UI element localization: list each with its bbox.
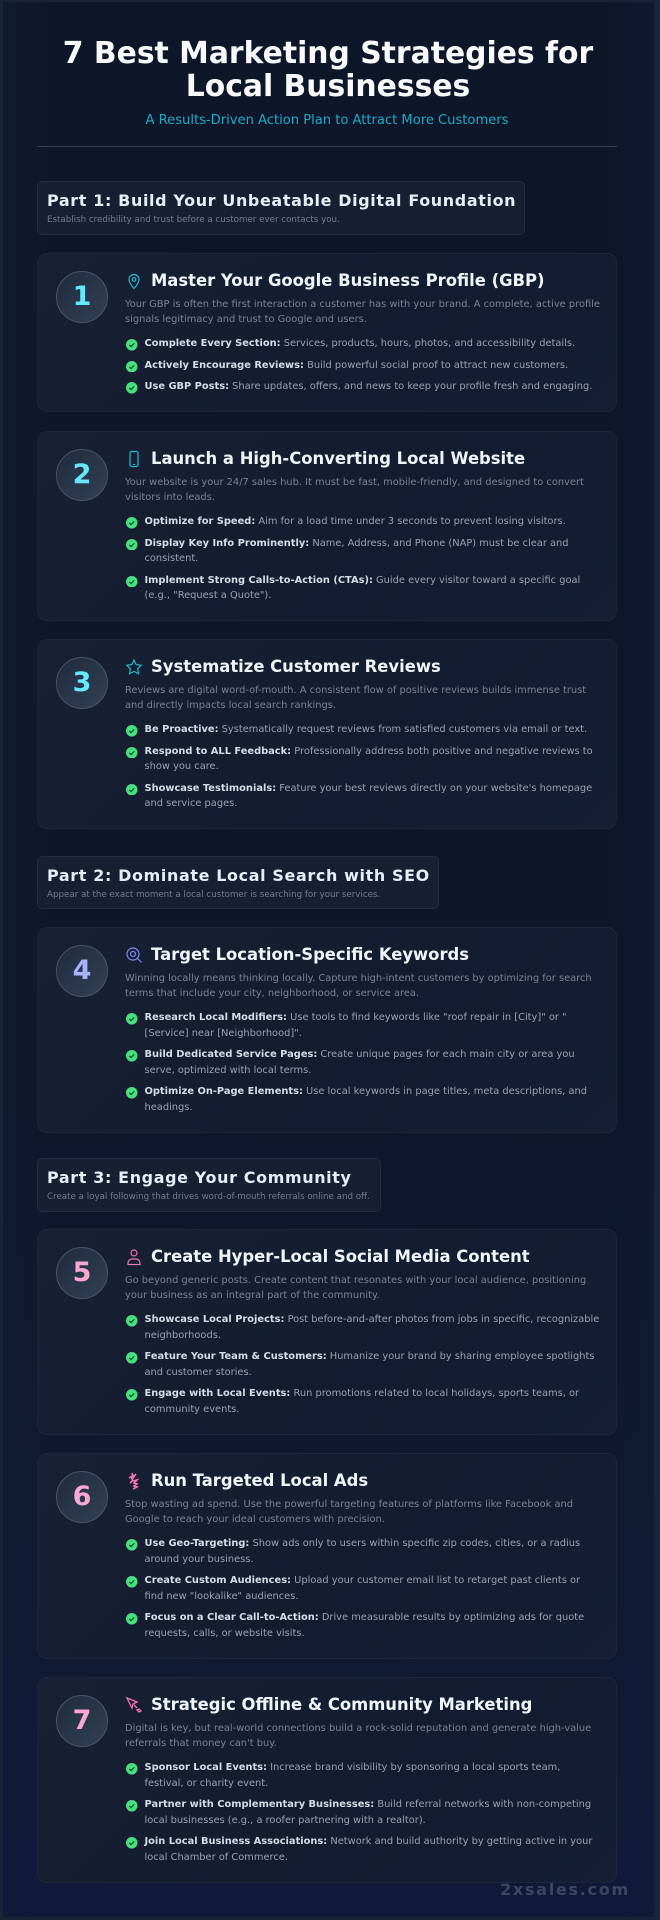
bullet [126,1799,591,1826]
title: Local Businesses [186,69,470,104]
number badge 7: 7 [73,1705,91,1736]
bullet: festival, or charity event. [144,1778,268,1789]
description: Winning locally means thinking locally. Capture high-intent customers by optimizing for search [125,972,592,984]
number badge 7 [56,1695,108,1747]
panel: strategy 3 [37,639,617,829]
bullet: Join Local Business Associations: Network and build authority by getting active in your [144,1836,592,1847]
heading: Target Location-Specific Keywords [151,944,469,964]
bullet [126,782,592,809]
bullet [126,746,593,772]
bullet: Partner with Complementary Businesses: Build referral networks with non-competing [144,1799,591,1810]
bullet: and customer stories. [144,1367,252,1378]
bullet: Sponsor Local Events: Increase brand visibility by sponsoring a local sports team, [144,1762,560,1773]
description [125,476,584,503]
bullet: local businesses (e.g., a roofer partnering with a realtor). [144,1815,426,1826]
panel: strategy 5 [37,1229,617,1435]
bullet: Implement Strong Calls-to-Action (CTAs): Guide every visitor toward a specific goal [144,574,580,586]
description: signals legitimacy and trust to Google and users. [125,314,367,325]
number badge 6: 6 [73,1481,91,1512]
panel: part 3 heading: Part 3: Engage Your Community [47,1168,352,1187]
heading: Create Hyper-Local Social Media Content [151,1246,530,1266]
bullet: [Service] near [Neighborhood]". [144,1028,302,1039]
bullet: Showcase Testimonials: Feature your best reviews directly on your website's homepage [144,782,592,794]
description: Reviews are digital word-of-mouth. A consistent flow of positive reviews builds immense trust [125,684,586,696]
bullet: Focus on a Clear Call-to-Action: Drive measurable results by optimizing ads for quote [144,1612,584,1623]
bullet: Showcase Local Projects: Post before-and-after photos from jobs in specific, recognizable [144,1314,599,1325]
panel: part 1 heading [37,181,525,235]
bullet [126,538,569,564]
bullet: Use GBP Posts: Share updates, offers, and news to keep your profile fresh and engaging. [144,381,592,392]
panel: strategy 4 [37,927,617,1133]
panel: part 2 heading [37,856,439,909]
bullet [126,1762,560,1789]
icon: map pin [128,274,140,290]
description: Your website is your 24/7 sales hub. It must be fast, mobile-friendly, and designed to convert [125,476,584,488]
number badge 2: 2 [73,459,91,490]
heading: Master Your Google Business Profile (GBP) [151,270,545,290]
bullet: Build Dedicated Service Pages: Create unique pages for each main city or area you [144,1049,575,1060]
bullet [126,1575,580,1602]
number badge 1 [56,271,108,323]
bullet [126,1538,580,1565]
bullet: local Chamber of Commerce. [144,1852,288,1863]
bullet: Display Key Info Prominently: Name, Address, and Phone (NAP) must be clear and [144,538,569,548]
description: terms that include your city, neighborhood, or service area. [125,988,419,999]
bullet: find new "lookalike" audiences. [144,1591,298,1602]
description [125,1274,586,1301]
description [125,1722,591,1749]
icon: ad target [128,1472,140,1490]
bullet: headings. [144,1102,193,1113]
bullet: Be Proactive: Systematically request reviews from satisfied customers via email or text. [144,724,587,735]
description [125,684,586,711]
bullet: Research Local Modifiers: Use tools to find keywords like "roof repair in [City]" or " [144,1012,567,1023]
bullet: Complete Every Section: Services, products, hours, photos, and accessibility details. [144,338,575,349]
heading: Systematize Customer Reviews [151,656,441,676]
bullet: Create Custom Audiences: Upload your customer email list to retarget past clients or [144,1575,580,1586]
icon: phone [129,450,139,468]
icon: search target [126,947,142,963]
icon: cursor [126,1696,142,1713]
bullet: consistent. [144,553,198,564]
number badge 6 [56,1471,108,1523]
bullet: show you care. [144,761,219,772]
watermark: 2xsales.com [500,1880,630,1899]
description: Go beyond generic posts. Create content that resonates with your local audience, positioning [125,1274,586,1286]
bullet: requests, calls, or website visits. [144,1628,305,1639]
panel: strategy 6 [37,1453,617,1659]
number badge 3 [56,657,108,709]
title [63,36,594,104]
number badge 1: 1 [73,281,91,312]
bullet: Actively Encourage Reviews: Build powerful social proof to attract new customers. [144,360,568,370]
panel: strategy 2 [37,431,617,621]
bullet [126,1012,567,1039]
heading: Run Targeted Local Ads [151,1470,368,1490]
number badge 4 [56,945,108,997]
number badge 3: 3 [73,667,91,698]
icon: star [126,658,142,675]
description [125,298,600,325]
description: Stop wasting ad spend. Use the powerful targeting features of platforms like Facebook and [125,1498,573,1510]
bullet [126,1388,580,1415]
number badge 4: 4 [73,955,91,986]
panel: part 1 heading: Part 1: Build Your Unbeatable Digital Foundation [47,191,516,210]
bullet: (e.g., "Request a Quote"). [144,590,271,601]
bullet: and service pages. [144,798,237,809]
description: Your GBP is often the first interaction a customer has with your brand. A complete, active profile [125,298,600,310]
description: visitors into leads. [125,492,215,503]
bullet: serve, optimized with local terms. [144,1065,311,1076]
bullet [126,574,580,601]
description [125,1498,573,1525]
bullet: Use Geo-Targeting: Show ads only to users within specific zip codes, cities, or a radius [144,1538,580,1549]
bullet: community events. [144,1404,239,1415]
panel: part 3 heading [37,1158,381,1212]
bullet: Respond to ALL Feedback: Professionally address both positive and negative reviews to [144,746,593,756]
title: 7 Best Marketing Strategies for [63,36,593,71]
bullet: neighborhoods. [144,1330,221,1341]
bullet: Feature Your Team & Customers: Humanize your brand by sharing employee spotlights [144,1351,595,1362]
number badge 5 [56,1247,108,1299]
bullet [126,1314,599,1341]
panel: part 2 heading: Appear at the exact moment a local customer is searching for your services. [47,890,380,900]
bullet: Optimize for Speed: Aim for a load time under 3 seconds to prevent losing visitors. [144,516,566,527]
bullet: around your business. [144,1554,254,1565]
bullet: Engage with Local Events: Run promotions related to local holidays, sports teams, or [144,1388,579,1399]
panel: part 3 heading: Create a loyal following that drives word-of-mouth referrals online and off. [47,1192,370,1202]
icon: person [127,1249,141,1266]
bullet [126,1836,592,1863]
bullet [126,1612,584,1639]
description: referrals that money can't buy. [125,1738,277,1749]
description: Digital is key, but real-world connections build a rock-solid reputation and generate high-value [125,1722,591,1734]
heading: Strategic Offline & Community Marketing [151,1694,532,1714]
panel: strategy 7 [37,1677,617,1883]
bullet [126,1086,587,1113]
bullet [126,1351,595,1378]
description [125,972,592,999]
number badge 5: 5 [73,1257,91,1288]
bullet: Optimize On-Page Elements: Use local keywords in page titles, meta descriptions, and [144,1086,587,1097]
bullet [126,1049,575,1076]
subtitle: A Results-Driven Action Plan to Attract More Customers [146,113,508,128]
description: Google to reach your ideal customers with precision. [125,1514,385,1525]
description: and directly impacts local search rankings. [125,700,336,711]
panel: strategy 1 [37,253,617,412]
number badge 2 [56,449,108,501]
panel: part 2 heading: Part 2: Dominate Local Search with SEO [47,866,430,885]
description: your business as an integral part of the community. [125,1290,380,1301]
panel: part 1 heading: Establish credibility and trust before a customer ever contacts you. [47,215,340,225]
heading: Launch a High-Converting Local Website [151,448,525,468]
